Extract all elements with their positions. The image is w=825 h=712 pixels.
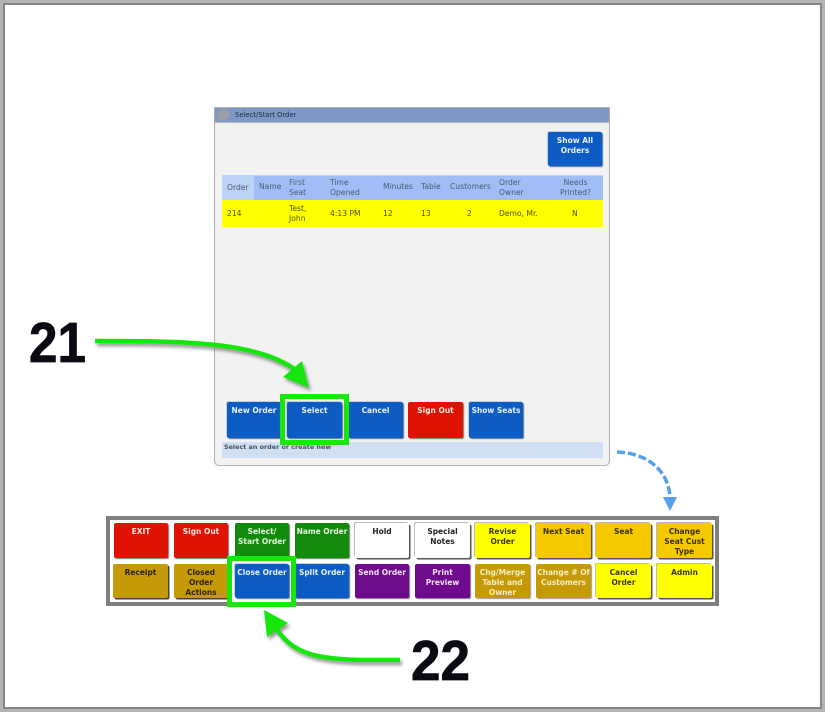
table column headers: Customers: [450, 182, 491, 191]
button: show all orders: Orders: [561, 145, 589, 155]
step number 21: 21: [29, 311, 86, 375]
button: sign out: Sign Out: [183, 526, 219, 536]
button: send order: Send Order: [358, 567, 406, 577]
table row: order 214: 2: [467, 209, 472, 218]
icon: window icon: [216, 108, 231, 122]
button: admin: [657, 564, 712, 598]
table row: order 214: 13: [421, 209, 431, 218]
button: cancel order: Order: [611, 577, 636, 587]
table column headers: Name: [259, 182, 281, 191]
panel: button toolbar: [106, 516, 719, 606]
button: change # of customers: Change # Of: [537, 567, 590, 577]
button: admin: Admin: [671, 567, 698, 577]
button: select/start order: [235, 523, 289, 558]
window title bar: Select/Start Order: [235, 111, 296, 119]
button: hold: Hold: [372, 526, 392, 536]
button: split order: [295, 564, 349, 598]
button: closed order actions: Actions: [185, 587, 217, 597]
table column headers: [259, 178, 591, 196]
step number 22: 22: [411, 629, 470, 693]
button: name order: Name Order: [297, 526, 347, 536]
button: show seats: Show Seats: [472, 405, 520, 415]
button: seat: [596, 523, 651, 558]
button: sign out: [408, 402, 463, 438]
arrow: 22 to close order button: [264, 610, 400, 660]
button: show all orders: Show All: [557, 135, 593, 145]
highlight: select button: [280, 394, 349, 445]
table row: order 214: 4:13 PM: [330, 209, 361, 218]
table row: order 214: 12: [383, 209, 393, 218]
table column headers: Minutes: [383, 182, 413, 191]
button: hold: [355, 523, 409, 558]
button: print preview: [415, 564, 470, 598]
button: revise order: Order: [490, 536, 515, 546]
button: print preview: Preview: [426, 577, 459, 587]
button: change # of customers: Customers: [541, 577, 586, 587]
button: chg/merge table and owner: Chg/Merge: [480, 567, 525, 577]
arrow: 21 to select button: [95, 341, 309, 388]
button: exit: [114, 523, 168, 558]
table column headers: Owner: [499, 188, 524, 196]
button: next seat: [536, 523, 591, 558]
button: cancel: [348, 402, 403, 438]
button: change seat cust type: Type: [675, 546, 694, 556]
table column headers: Opened: [330, 188, 360, 196]
button: sign out: [174, 523, 228, 558]
table row: order 214: John: [289, 214, 306, 222]
button: closed order actions: [174, 564, 228, 598]
header cell: order: [222, 175, 254, 200]
button: close order: [235, 564, 289, 598]
table row: order 214: N: [572, 209, 578, 218]
button: special notes: [415, 523, 470, 558]
button: select: Select: [301, 405, 328, 415]
button: special notes: Notes: [430, 536, 455, 546]
table column headers: Needs: [564, 178, 587, 187]
button: change # of customers: [536, 564, 591, 598]
button: sign out: Sign Out: [417, 405, 454, 415]
button: select/start order: Select/: [248, 526, 276, 536]
button: revise order: [475, 523, 530, 558]
table row: order 214: [222, 200, 603, 227]
button: new order: [227, 402, 281, 438]
button: receipt: Receipt: [125, 567, 156, 577]
button: select/start order: Start Order: [238, 536, 286, 546]
button: closed order actions: Closed: [187, 567, 215, 577]
button: name order: [295, 523, 349, 558]
button: change seat cust type: Seat Cust: [664, 536, 705, 546]
arrow: dashed window to toolbar: [617, 452, 677, 511]
button: show seats: [469, 402, 523, 438]
highlight: close order button: [227, 556, 296, 607]
table column headers: First: [289, 178, 305, 187]
table column headers: Table: [421, 182, 441, 191]
table row: order 214: 214: [227, 209, 242, 218]
button: next seat: Next Seat: [543, 526, 584, 536]
button: change seat cust type: [657, 523, 712, 558]
button: exit: EXIT: [132, 526, 150, 536]
table column headers: Printed?: [560, 188, 591, 196]
table column headers: Time: [330, 178, 349, 187]
button: new order: New Order: [232, 405, 276, 415]
button: closed order actions: Order: [189, 577, 213, 587]
button: chg/merge table and owner: Owner: [489, 587, 516, 597]
button: select: [287, 402, 342, 438]
button: send order: [355, 564, 409, 598]
window title bar: [215, 108, 609, 123]
button: cancel order: Cancel: [610, 567, 637, 577]
table header: [222, 175, 603, 200]
table column headers: Seat: [289, 188, 306, 196]
table row: order 214: Test,: [289, 204, 306, 213]
button: close order: Close Order: [237, 567, 287, 577]
button: chg/merge table and owner: Table and: [482, 577, 523, 587]
button: cancel: Cancel: [362, 405, 389, 415]
button: seat: Seat: [614, 526, 633, 536]
panel: select/start order window: [215, 108, 609, 465]
button: show all orders: [548, 132, 602, 166]
button: chg/merge table and owner: [475, 564, 530, 598]
button: print preview: Print: [432, 567, 453, 577]
button: special notes: Special: [427, 526, 458, 536]
button: split order: Split Order: [299, 567, 345, 577]
button: receipt: [113, 564, 168, 598]
table row: order 214: Demo, Mr.: [499, 209, 538, 218]
header cell: order: Order: [227, 183, 249, 192]
table column headers: Order: [499, 178, 521, 187]
status bar: [222, 442, 603, 458]
button: revise order: Revise: [489, 526, 516, 536]
status bar: Select an order or create new: [224, 443, 331, 451]
button: cancel order: [596, 564, 651, 598]
button: change seat cust type: Change: [669, 526, 700, 536]
